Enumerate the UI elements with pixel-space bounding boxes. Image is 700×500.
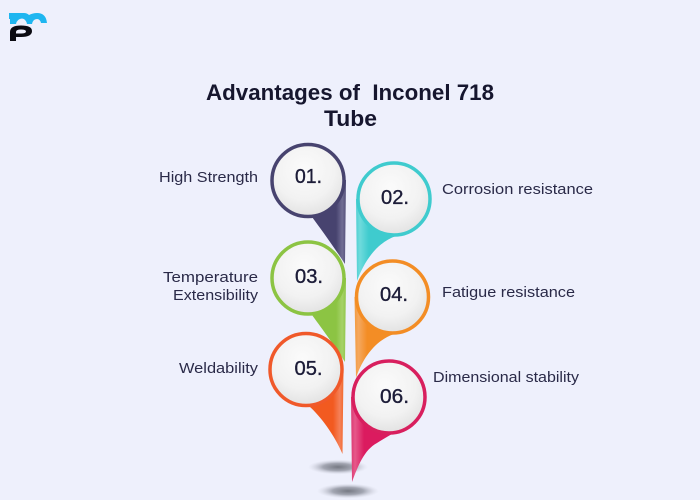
label: Temperature Extensibility bbox=[163, 270, 259, 304]
label: Temperature Extensibility: Extensibility bbox=[173, 288, 259, 304]
title bbox=[206, 80, 494, 131]
pin 03: 03. bbox=[295, 266, 323, 288]
pin 04 bbox=[354, 261, 428, 378]
pin 03 bbox=[272, 242, 346, 362]
pin 02 bbox=[356, 163, 430, 281]
label: High Strength: High Strength bbox=[159, 170, 258, 186]
pin 06 bbox=[351, 361, 425, 482]
pin 05 bbox=[270, 334, 344, 454]
pin 05: 05. bbox=[294, 358, 322, 380]
shadow: pin 05 bbox=[308, 460, 368, 474]
pin 01: 01. bbox=[295, 166, 322, 188]
title: Advantages of Inconel 718 bbox=[206, 80, 494, 105]
label: Temperature Extensibility: Temperature bbox=[163, 270, 258, 286]
shadow: pin 06 bbox=[317, 484, 379, 498]
pin 02: 02. bbox=[381, 187, 409, 209]
logo bbox=[9, 13, 47, 41]
pin 04: 04. bbox=[380, 284, 408, 306]
label: Dimensional stability: Dimensional stability bbox=[433, 370, 580, 386]
label: Weldability: Weldability bbox=[179, 361, 259, 377]
label: Fatigue resistance: Fatigue resistance bbox=[442, 285, 575, 301]
pin 01 bbox=[272, 144, 346, 264]
title: Tube bbox=[324, 106, 377, 131]
label: Corrosion resistance: Corrosion resistance bbox=[442, 182, 593, 198]
pin 06: 06. bbox=[380, 386, 409, 408]
